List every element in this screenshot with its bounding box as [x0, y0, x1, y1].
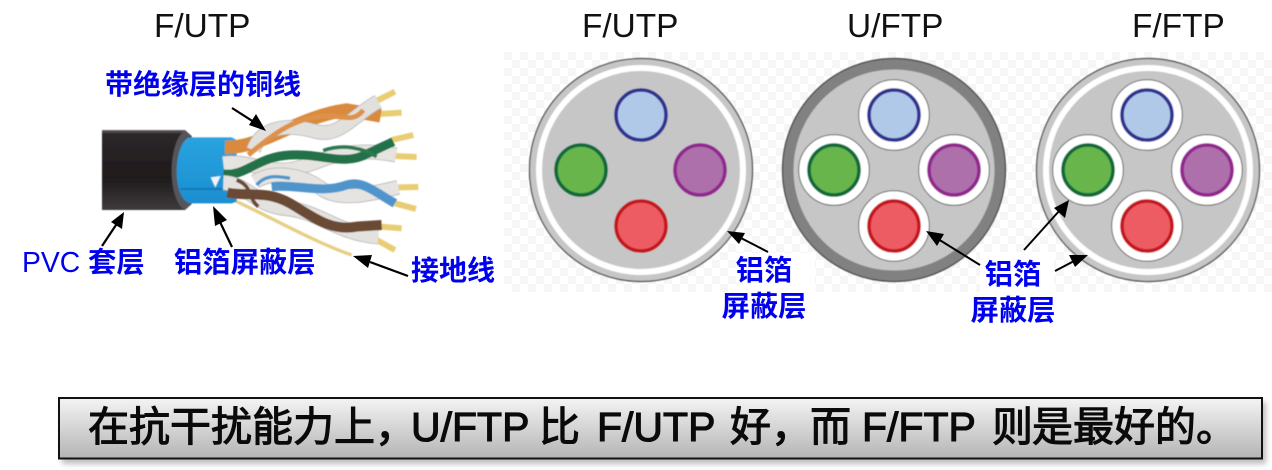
conclusion text: 比: [539, 404, 580, 450]
label: foil shield, U/FTP and F/FTP: 屏蔽层: [971, 294, 1055, 326]
label: foil shield, F/UTP: 屏蔽层: [722, 290, 806, 322]
wire: blue: [616, 90, 666, 140]
brown pair: [223, 183, 378, 237]
cross-section: F/FTP: [1036, 58, 1260, 282]
label: insulated copper wire: 带绝缘层的铜线: [105, 69, 301, 100]
blue pair: [255, 175, 398, 196]
arrow: to insulated copper wire: [232, 108, 266, 131]
orange pair: [225, 110, 381, 147]
illustration: stripped twisted-pair cable: [102, 92, 418, 255]
cross-section: U/FTP: [782, 58, 1006, 282]
jacket: [102, 130, 192, 210]
label: foil shield, U/FTP and F/FTP: 铝箔: [985, 258, 1041, 290]
wire: red: [616, 201, 666, 251]
conclusion box: [59, 398, 1266, 464]
ground wire: [233, 200, 352, 255]
wire: blue with foil: [859, 80, 929, 150]
cross-section: F/UTP: [530, 58, 752, 282]
arrow: to PVC jacket: [102, 212, 124, 246]
arrow: to drain wire: [353, 255, 408, 276]
label: PVC jacket: PVC 套层: [22, 246, 145, 278]
copper ends: [375, 92, 418, 250]
conclusion text: 而: [810, 404, 851, 450]
wire: purple with foil: [1172, 135, 1242, 205]
title: F/FTP section: F/FTP: [1132, 8, 1225, 45]
green pair: [223, 152, 396, 170]
wire: green: [556, 145, 606, 195]
wire: blue with foil: [1112, 80, 1182, 150]
title: F/UTP cable: F/UTP: [154, 8, 250, 45]
label: drain wire: 接地线: [411, 255, 495, 286]
conclusion text: 在抗干扰能力上，: [88, 404, 416, 450]
arrow: to foil shield: [213, 206, 232, 247]
arrow: to F/FTP pair foil: [1024, 200, 1069, 250]
conclusion text: 是最好的。: [1032, 404, 1237, 450]
wire: purple: [675, 145, 725, 195]
arrow: to U/FTP pair foil: [926, 231, 980, 265]
conclusion text: U/FTP: [411, 404, 529, 450]
white patches behind labels: [736, 252, 1054, 292]
conclusion text: F/UTP: [597, 404, 715, 450]
wire: purple with foil: [919, 135, 989, 205]
checkerboard backdrop: [504, 52, 1272, 292]
wire: green with foil: [799, 135, 869, 205]
label: aluminium foil shield: 铝箔屏蔽层: [174, 246, 316, 278]
foil: [177, 137, 237, 203]
conclusion text: F/FTP: [862, 404, 976, 450]
conclusion text: 则: [992, 404, 1033, 450]
wire: red with foil: [859, 191, 929, 261]
conclusion text: 好，: [730, 404, 812, 450]
arrow: to F/UTP foil: [727, 231, 768, 252]
wire: red with foil: [1112, 191, 1182, 261]
arrow: to F/FTP overall foil: [1055, 255, 1088, 271]
title: U/FTP section: U/FTP: [847, 8, 943, 45]
foil tip: [211, 176, 221, 187]
title: F/UTP section: F/UTP: [582, 8, 678, 45]
label: foil shield, F/UTP: 铝箔: [736, 254, 792, 286]
wire: green with foil: [1053, 135, 1123, 205]
